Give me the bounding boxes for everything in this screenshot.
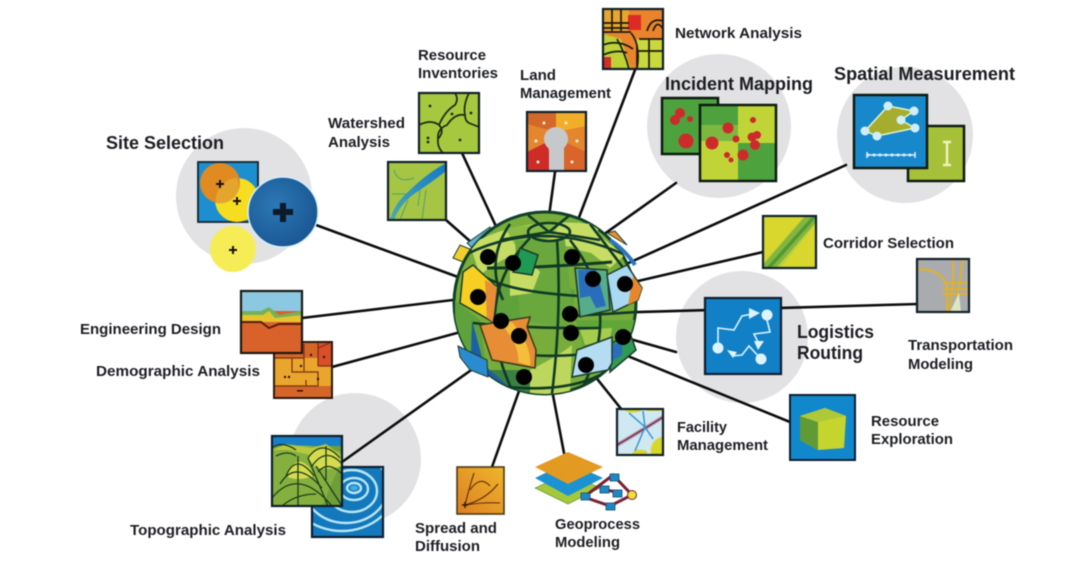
label: Engineering Design: Engineering Design (80, 322, 221, 338)
label: Facility Management: Facility (677, 420, 728, 436)
icon: demographic analysis (274, 342, 332, 398)
label: Spread and Diffusion: Spread and (415, 521, 497, 537)
label: Logistics Routing (797, 321, 874, 363)
label: Resource Exploration: Resource (871, 414, 939, 430)
globe: green patch lower right (610, 333, 636, 372)
label: Topographic Analysis: Topographic Analysis (130, 523, 286, 539)
icon: engineering design (241, 291, 302, 353)
label: Spatial Measurement: Spatial Measurement (834, 63, 1015, 84)
globe: light blue patch upper (607, 265, 642, 312)
label: Geoprocess Modeling (555, 517, 640, 551)
icon: facility management (617, 409, 663, 455)
icon: land management (527, 112, 586, 171)
label: Incident Mapping: Incident Mapping (665, 73, 813, 94)
icon: network analysis (603, 9, 663, 69)
icon: geoprocess modeling (535, 452, 636, 510)
globe: blue green patch (575, 268, 610, 317)
globe: outside patches (453, 227, 627, 262)
label: Land Management: Management (520, 86, 611, 102)
icon: transportation modeling (917, 259, 969, 312)
globe: yellow patch (460, 265, 497, 322)
label: Spread and Diffusion (415, 521, 497, 555)
globe: light blue patch lower (572, 337, 612, 377)
label: Land Management: Land (520, 68, 556, 84)
label: Facility Management (677, 420, 768, 454)
label: Resource Exploration: Exploration (871, 432, 953, 448)
panel: grey backdrop circles (176, 54, 973, 525)
globe: black location dots (470, 249, 633, 385)
icon: topographic analysis (272, 431, 398, 537)
label: Transportation Modeling: Modeling (908, 357, 973, 373)
globe: blue crescent (470, 320, 508, 386)
globe: right rim arc (610, 240, 635, 265)
label: Spread and Diffusion: Diffusion (415, 539, 480, 555)
label: Transportation Modeling (908, 338, 1013, 373)
globe: grid lines (470, 214, 635, 394)
globe: terrain bands (455, 222, 640, 395)
label: Watershed Analysis: Watershed (328, 116, 405, 132)
icon: resource inventories (419, 93, 479, 153)
icon: logistics routing (705, 298, 781, 374)
label: Logistics Routing: Logistics (797, 321, 874, 342)
label: Transportation Modeling: Transportation (908, 338, 1013, 354)
globe (452, 212, 642, 395)
icon: corridor selection (759, 212, 825, 274)
label: Watershed Analysis (328, 116, 405, 151)
label: Resource Inventories: Inventories (418, 66, 498, 82)
globe: blue patch lower left (458, 346, 488, 377)
label: Corridor Selection: Corridor Selection (823, 236, 954, 252)
label: Land Management (520, 68, 611, 102)
globe: sphere (454, 212, 636, 394)
globe: orange patch (480, 317, 536, 368)
label: Demographic Analysis: Demographic Analysis (96, 364, 260, 380)
connector lines (302, 70, 918, 467)
icon: site selection (198, 162, 318, 272)
label: Geoprocess Modeling: Modeling (555, 535, 620, 551)
label: Resource Inventories: Resource (418, 48, 486, 64)
label: Watershed Analysis: Analysis (328, 135, 390, 151)
label: Logistics Routing: Routing (797, 342, 863, 363)
icon: incident mapping (662, 98, 776, 181)
icon: spatial measurement (854, 95, 964, 181)
icon: resource exploration (790, 395, 855, 460)
globe: green patch (513, 248, 538, 275)
icon: spread and diffusion (457, 467, 504, 514)
icon: watershed analysis (388, 162, 446, 220)
label: Network Analysis: Network Analysis (675, 26, 802, 42)
label: Facility Management: Management (677, 438, 768, 454)
label: Resource Exploration (871, 414, 953, 448)
label: Resource Inventories (418, 48, 498, 82)
label: Site Selection: Site Selection (106, 132, 224, 153)
label: Geoprocess Modeling: Geoprocess (555, 517, 640, 533)
